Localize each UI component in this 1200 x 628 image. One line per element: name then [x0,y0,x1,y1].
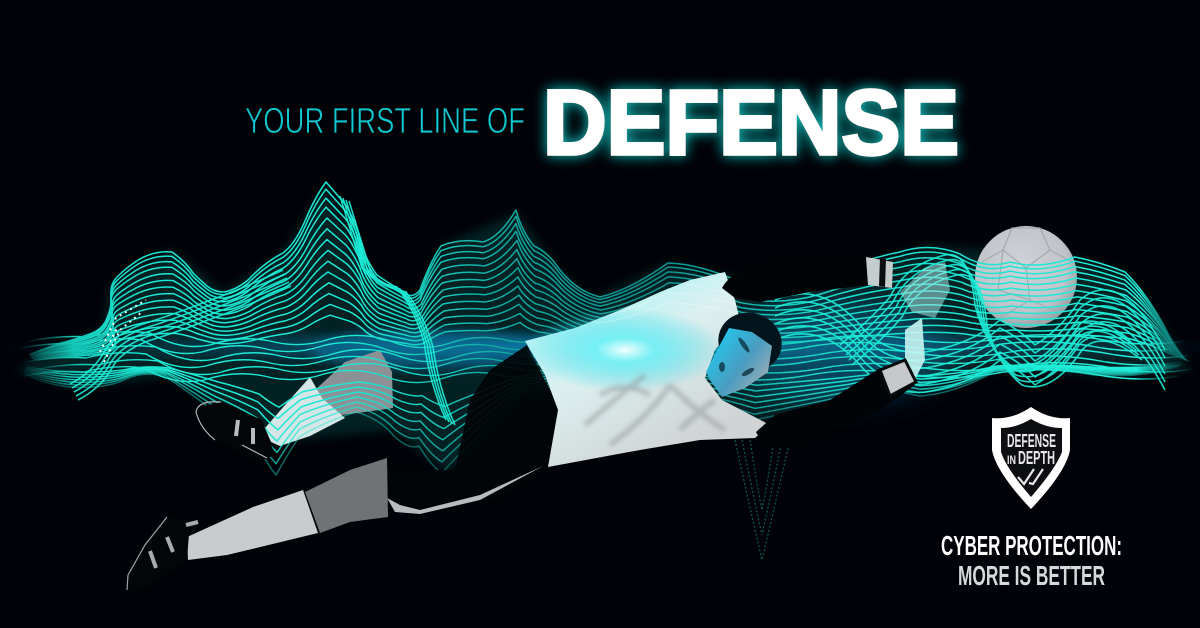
upper wrist band [866,257,893,288]
infographic canvas [20,78,1194,590]
upper boot [195,402,275,462]
headline: defense: DEFENSE [543,72,959,174]
soft teal glow behind the waves [15,184,1190,473]
cyan wave lines: central band [22,332,1193,383]
horizontal light band [0,302,1200,402]
shirt [525,272,770,467]
tagline: more is better: MORE IS BETTER [958,560,1105,591]
shirt glow [525,308,725,392]
shorts [385,345,560,512]
upper leg knee [314,350,393,415]
shield text: defense: DEFENSE [1007,431,1056,451]
shield text: depth: DEPTH [1018,448,1055,468]
hair [710,304,790,380]
upper wrist stripe [879,258,886,287]
lower arm sleeve [756,368,915,448]
white dots in left ribbon [100,300,146,362]
shield text: in: IN [1007,453,1016,467]
socks and knee behind the waves [265,350,393,446]
icon: double check [1018,469,1043,484]
face features [719,336,755,378]
icon: defense in depth shield [992,407,1070,509]
shirt wrinkles [585,375,725,445]
cyan wave lines: lower envelope [24,364,1182,475]
upper hand [900,262,950,318]
dim dotted wave below the player [735,440,790,560]
lower boot [127,517,198,594]
face [706,328,772,397]
upper leg sock [265,377,345,446]
cyan wave lines: upper envelope [30,182,1189,361]
upper arm sleeve [722,256,868,302]
player: goalkeeper [126,257,950,590]
right side sleeve [905,318,925,385]
shorts white trim [387,466,543,514]
faint wave lines over shirt [590,273,738,324]
lower thigh [305,458,388,533]
headline: your first line of: YOUR FIRST LINE OF [245,100,525,141]
lower wrist band [880,360,916,396]
icon: soccer ball [975,226,1077,328]
bright wave ribbons [70,196,1165,425]
lower sock [187,490,318,560]
